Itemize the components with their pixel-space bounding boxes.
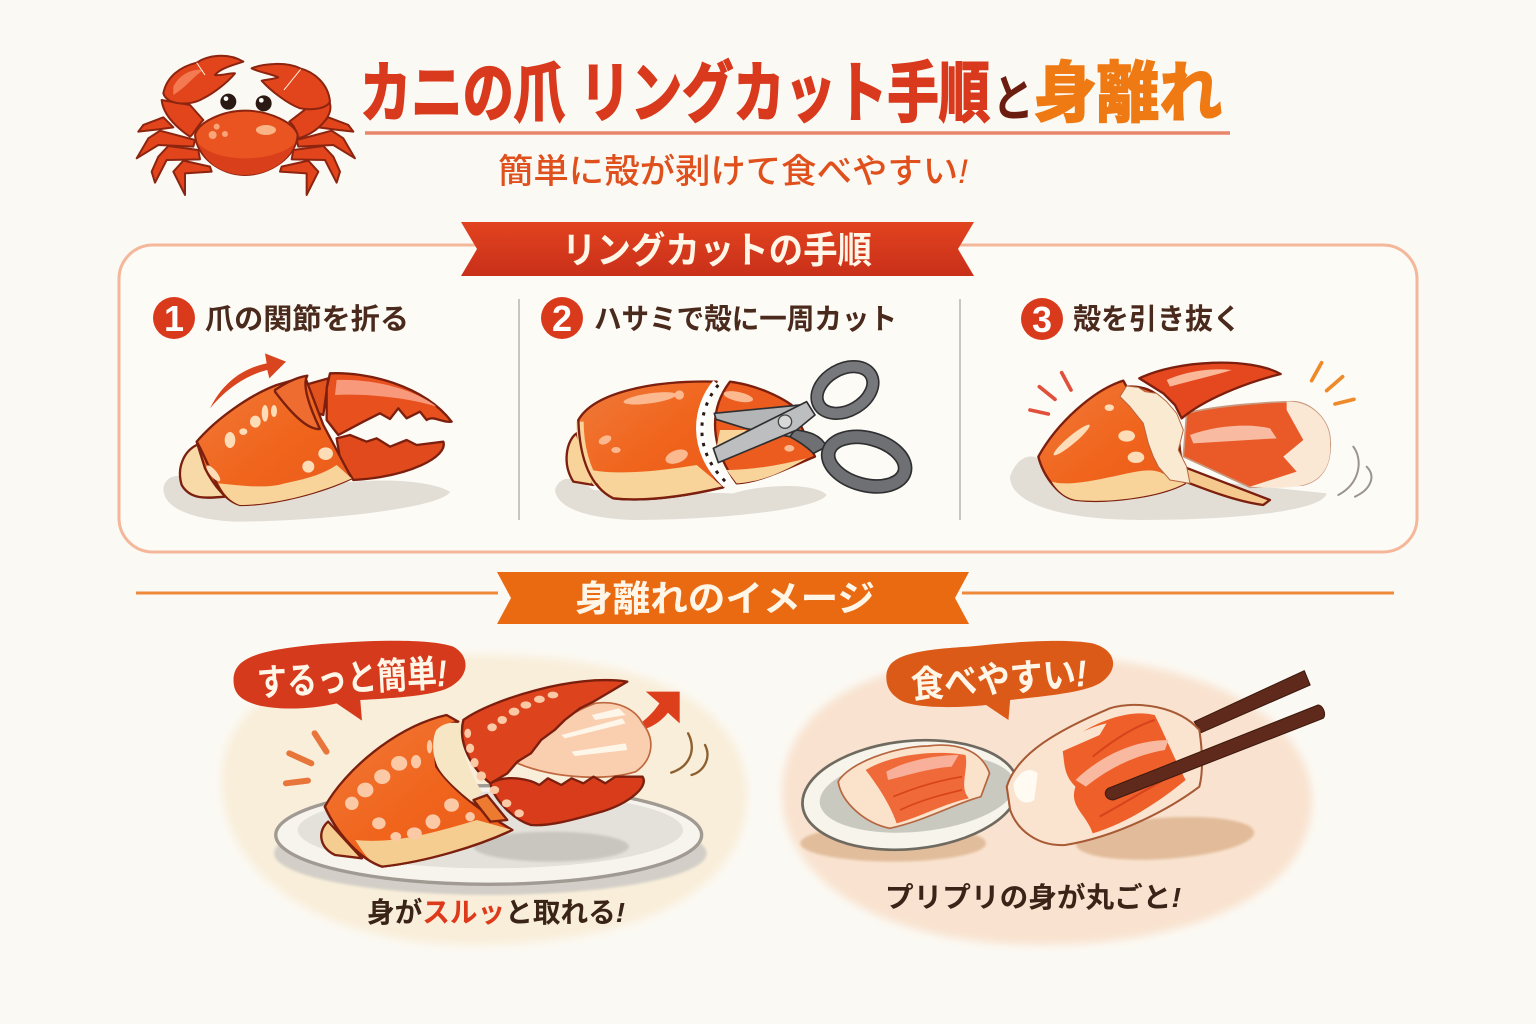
illustration: step 3 pulled shell (1010, 363, 1371, 520)
step 1 heading: 爪の関節を折る (205, 303, 409, 336)
step 2 heading: ハサミで殻に一周カット (594, 303, 897, 336)
heading divider right (962, 592, 1394, 594)
title: と (992, 71, 1034, 127)
step 1 heading: 1 (164, 298, 184, 339)
title: 身離れ (1034, 56, 1222, 130)
step 3 heading (1021, 298, 1241, 340)
heading divider left (136, 592, 498, 594)
illustration: plate and claw with meat (274, 680, 707, 895)
illustration: plate with meat (797, 730, 1024, 862)
step 2 heading (541, 297, 897, 339)
banner: meat separation heading: 身離れのイメージ (575, 578, 875, 619)
panel: easy removal (222, 641, 747, 945)
illustration: meat held with chopsticks (1007, 671, 1325, 865)
caption: whole plump meat: プリプリの身が丸ごと! (885, 881, 1181, 913)
speech bubble: easy (234, 641, 466, 721)
step 3 heading: 3 (1032, 299, 1052, 340)
speech bubble: easy to eat (886, 641, 1113, 720)
speech bubble: easy to eat: 食べやすい! (910, 653, 1088, 706)
illustration: step 1 claw (163, 353, 452, 522)
panel: ring cut steps (119, 222, 1417, 552)
title: カニの爪 リングカット手順 (360, 56, 990, 130)
step 2 heading: 2 (552, 298, 572, 339)
step 3 heading: 殻を引き抜く (1073, 303, 1241, 336)
title underline (365, 131, 1230, 135)
caption: comes off smoothly: 身がスルッと取れる! (367, 896, 625, 928)
banner: meat separation heading (497, 572, 969, 624)
subtitle: 簡単に殻が剥けて食べやすい ! (498, 153, 969, 191)
banner: ring cut heading: リングカットの手順 (562, 230, 872, 271)
panel: easy to eat (782, 641, 1325, 945)
step 1 heading (153, 297, 409, 339)
icon: crab mascot (137, 56, 355, 195)
banner: ring cut heading (461, 222, 974, 276)
speech bubble: easy: するっと簡単! (256, 653, 448, 704)
illustration: step 2 claw and scissors (555, 357, 911, 520)
